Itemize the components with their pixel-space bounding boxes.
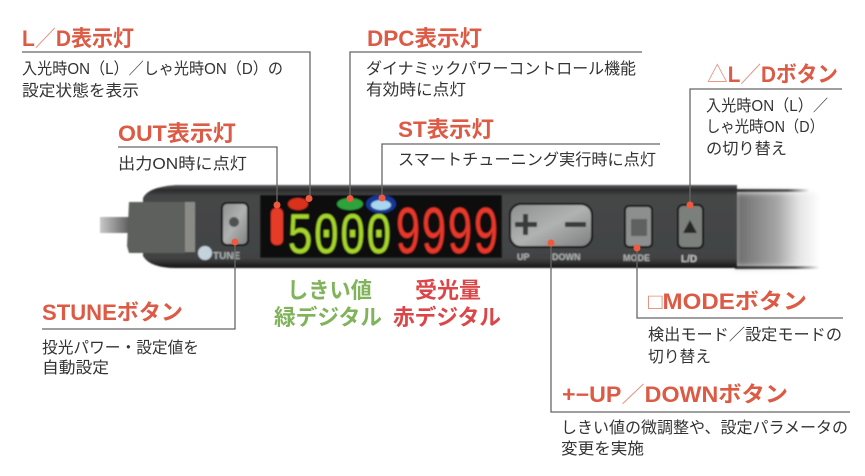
callout: DPC indicator: [366, 26, 636, 99]
L/D label: L/D: [681, 254, 697, 265]
device body: [143, 185, 737, 268]
DPC indicator: [337, 198, 363, 210]
callout: received light red digital: [393, 278, 501, 330]
callout: ST indicator: [398, 117, 656, 169]
callout: DPC indicator: 有効時に点灯: [366, 81, 466, 99]
green digital display: 5000: [287, 206, 392, 271]
callout: DPC indicator: DPC表示灯: [367, 26, 482, 51]
cable: [100, 217, 132, 233]
callout: MODE button: [648, 289, 842, 366]
L/D button: [678, 205, 703, 248]
UP label: UP: [517, 252, 530, 262]
callout: L/D indicator: L／D表示灯: [22, 26, 134, 51]
callout: ST indicator: スマートチューニング実行時に点灯: [398, 151, 656, 169]
callout: threshold green digital: しきい値: [287, 278, 372, 303]
callout: received light red digital: 赤デジタル: [393, 305, 501, 330]
callout: STUNE button: 自動設定: [42, 359, 109, 377]
OUT indicator: [271, 208, 283, 245]
device right end: [726, 189, 820, 269]
MODE button: [625, 206, 652, 247]
UP DOWN button: [510, 204, 592, 247]
callout: L/D indicator: 入光時ON（L）／しゃ光時ON（D）の: [22, 60, 283, 78]
callout: received light red digital: 受光量: [415, 278, 481, 303]
callout: MODE button: □MODEボタン: [648, 289, 807, 314]
callout: threshold green digital: [274, 278, 382, 330]
callout: MODE button: 切り替え: [648, 348, 711, 366]
callout: DPC indicator: ダイナミックパワーコントロール機能: [366, 60, 636, 78]
callout: L/D indicator: [22, 26, 283, 100]
callout: STUNE button: 投光パワー・設定値を: [42, 339, 199, 357]
callout: L/D button: 入光時ON（L）／: [706, 97, 828, 115]
STUNE label: TUNE: [213, 251, 241, 262]
callout: L/D button: △L／Dボタン: [707, 62, 838, 87]
MODE label: MODE: [623, 253, 650, 263]
connector: [127, 202, 195, 253]
callout: L/D button: しゃ光時ON（D）: [706, 118, 824, 136]
leader lines: [22, 52, 850, 412]
callout: UP DOWN button: +−UP／DOWNボタン: [562, 382, 788, 407]
red digital display: 9999: [395, 197, 499, 274]
callout: MODE button: 検出モード／設定モードの: [648, 326, 842, 344]
callout: OUT indicator: [118, 121, 247, 173]
DOWN label: DOWN: [552, 252, 580, 262]
L/D indicator: [288, 198, 308, 210]
display panel: [260, 195, 502, 258]
callout: L/D button: [706, 62, 838, 158]
callout: UP DOWN button: [561, 382, 848, 458]
sensor device: [127, 185, 820, 274]
callout: L/D button: の切り替え: [706, 140, 787, 158]
callout: STUNE button: STUNEボタン: [42, 300, 183, 325]
STUNE button: [222, 203, 248, 245]
callout: OUT indicator: OUT表示灯: [118, 121, 236, 146]
callout: L/D indicator: 設定状態を表示: [22, 82, 139, 100]
callout: UP DOWN button: 変更を実施: [561, 440, 644, 458]
callout: OUT indicator: 出力ON時に点灯: [118, 155, 247, 173]
callout: threshold green digital: 緑デジタル: [274, 305, 382, 330]
ST indicator: [366, 195, 396, 213]
callout: UP DOWN button: しきい値の微調整や、設定パラメータの: [561, 419, 848, 437]
callout: ST indicator: ST表示灯: [398, 117, 494, 142]
callout: STUNE button: [42, 300, 199, 377]
STUNE label: [198, 246, 241, 262]
